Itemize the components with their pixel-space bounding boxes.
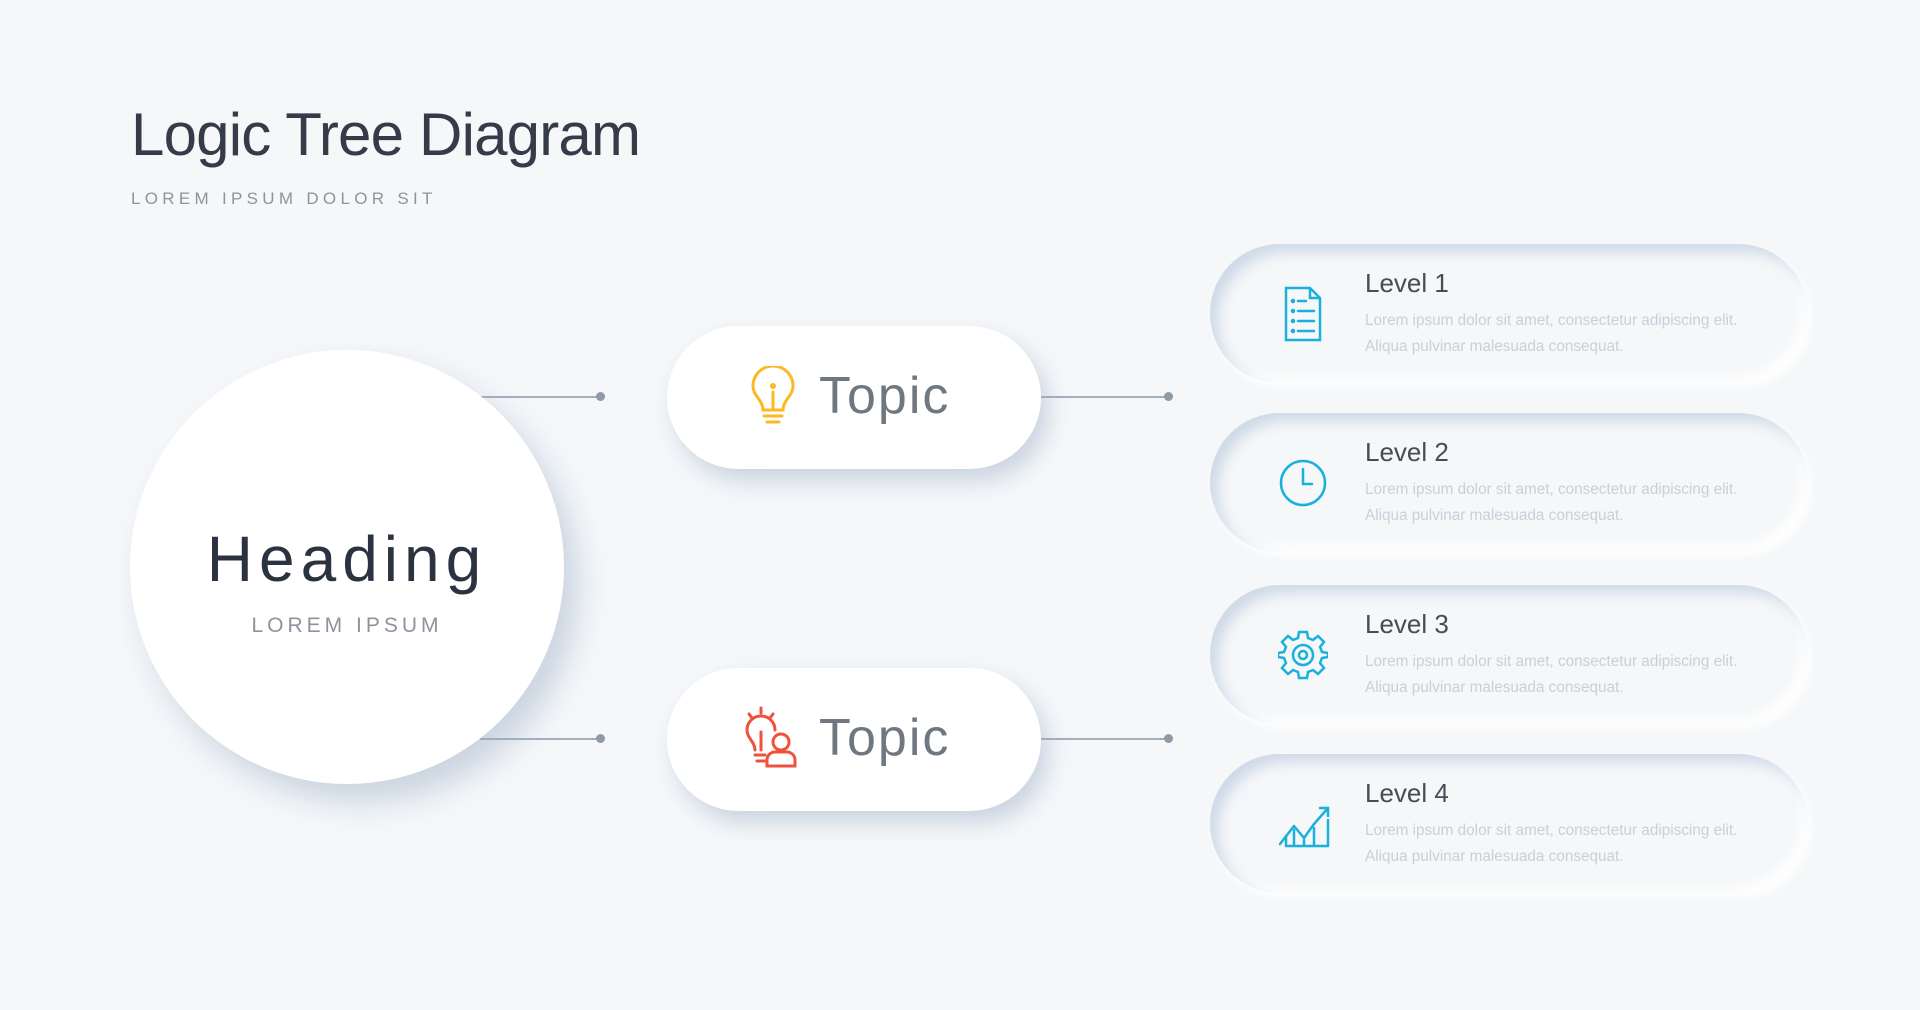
icon: growth chart <box>1278 806 1330 848</box>
level card 1: Lorem ipsum dolor sit amet, consectetur adipiscing elit. <box>1365 312 1737 329</box>
connector dot <box>596 392 605 401</box>
topic pill 1 <box>667 326 1041 469</box>
title: Logic Tree Diagram <box>131 101 640 168</box>
icon: lightbulb <box>752 366 794 424</box>
level card 4: Level 4 <box>1365 778 1449 808</box>
level card 2: Lorem ipsum dolor sit amet, consectetur adipiscing elit. <box>1365 481 1737 498</box>
topic label: Topic <box>819 367 950 425</box>
level card 4: Lorem ipsum dolor sit amet, consectetur adipiscing elit. <box>1365 822 1737 839</box>
level card 1: Level 1 <box>1365 268 1449 298</box>
level card 3: Level 3 <box>1365 609 1449 639</box>
connector: circle to top topic <box>480 396 600 398</box>
icon: gear <box>1278 630 1328 680</box>
level card 2: Level 2 <box>1365 437 1449 467</box>
connector dot <box>596 734 605 743</box>
level card 1: Aliqua pulvinar malesuada consequat. <box>1365 338 1624 355</box>
connector: circle to bottom topic <box>480 738 600 740</box>
heading text: Heading <box>207 523 487 595</box>
level card 3: Aliqua pulvinar malesuada consequat. <box>1365 679 1624 696</box>
level card 2 <box>1210 413 1808 552</box>
topic label: Topic <box>819 709 950 767</box>
connector dot <box>1164 392 1173 401</box>
icon: document list <box>1284 286 1322 342</box>
connector dot <box>1164 734 1173 743</box>
subtitle: LOREM IPSUM DOLOR SIT <box>131 189 437 208</box>
level card 4 <box>1210 754 1808 893</box>
level card 3 <box>1210 585 1808 724</box>
level card 3: Lorem ipsum dolor sit amet, consectetur adipiscing elit. <box>1365 653 1737 670</box>
level card 2: Aliqua pulvinar malesuada consequat. <box>1365 507 1624 524</box>
heading subtext: LOREM IPSUM <box>251 614 443 637</box>
icon: clock <box>1280 460 1326 506</box>
level card 4: Aliqua pulvinar malesuada consequat. <box>1365 848 1624 865</box>
icon: idea person <box>746 706 796 768</box>
connector: top topic to levels <box>1041 396 1169 398</box>
heading circle <box>130 350 564 784</box>
connector: bottom topic to levels <box>1041 738 1169 740</box>
level card 1 <box>1210 244 1808 383</box>
topic pill 2 <box>667 668 1041 811</box>
